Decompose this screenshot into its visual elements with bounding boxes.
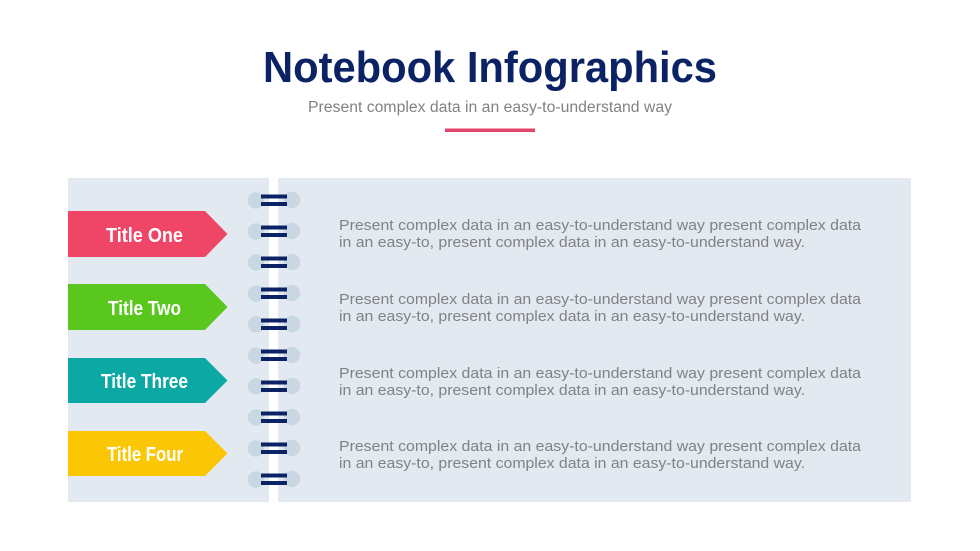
description: Title Four xyxy=(339,438,862,472)
subtitle: Present complex data in an easy-to-understand way xyxy=(308,99,672,116)
description: Title One xyxy=(339,217,862,251)
description: Title Four: Present complex data in an easy-to-understand way present complex data xyxy=(339,438,862,455)
description: Title Three: Present complex data in an easy-to-understand way present complex data xyxy=(339,365,862,382)
arrow tab: Title Four: Title Four xyxy=(107,444,183,466)
arrow tab: Title One: Title One xyxy=(106,225,183,247)
panel: notebook right page xyxy=(278,178,911,502)
description: Title Four: in an easy-to, present complex data in an easy-to-understand way. xyxy=(339,455,805,472)
arrow tab: Title Two: Title Two xyxy=(108,298,181,320)
description: Title Three xyxy=(339,365,862,399)
description: Title One: Present complex data in an easy-to-understand way present complex data xyxy=(339,217,862,234)
title: Notebook Infographics xyxy=(263,43,717,92)
arrow tab: Title Two xyxy=(68,284,228,330)
description: Title One: in an easy-to, present complex data in an easy-to-understand way. xyxy=(339,234,805,251)
arrow tab: Title Three: Title Three xyxy=(101,371,188,393)
description: Title Two: Present complex data in an easy-to-understand way present complex data xyxy=(339,291,862,308)
arrow tab: Title Three xyxy=(68,358,228,403)
description: Title Two: in an easy-to, present complex data in an easy-to-understand way. xyxy=(339,308,805,325)
title underline xyxy=(445,128,535,132)
description: Title Two xyxy=(339,291,862,325)
notebook spiral binding xyxy=(248,192,300,488)
arrow tab: Title One xyxy=(68,211,228,257)
description: Title Three: in an easy-to, present complex data in an easy-to-understand way. xyxy=(339,382,805,399)
panel: notebook left page xyxy=(68,178,269,502)
arrow tab: Title Four xyxy=(68,431,228,476)
